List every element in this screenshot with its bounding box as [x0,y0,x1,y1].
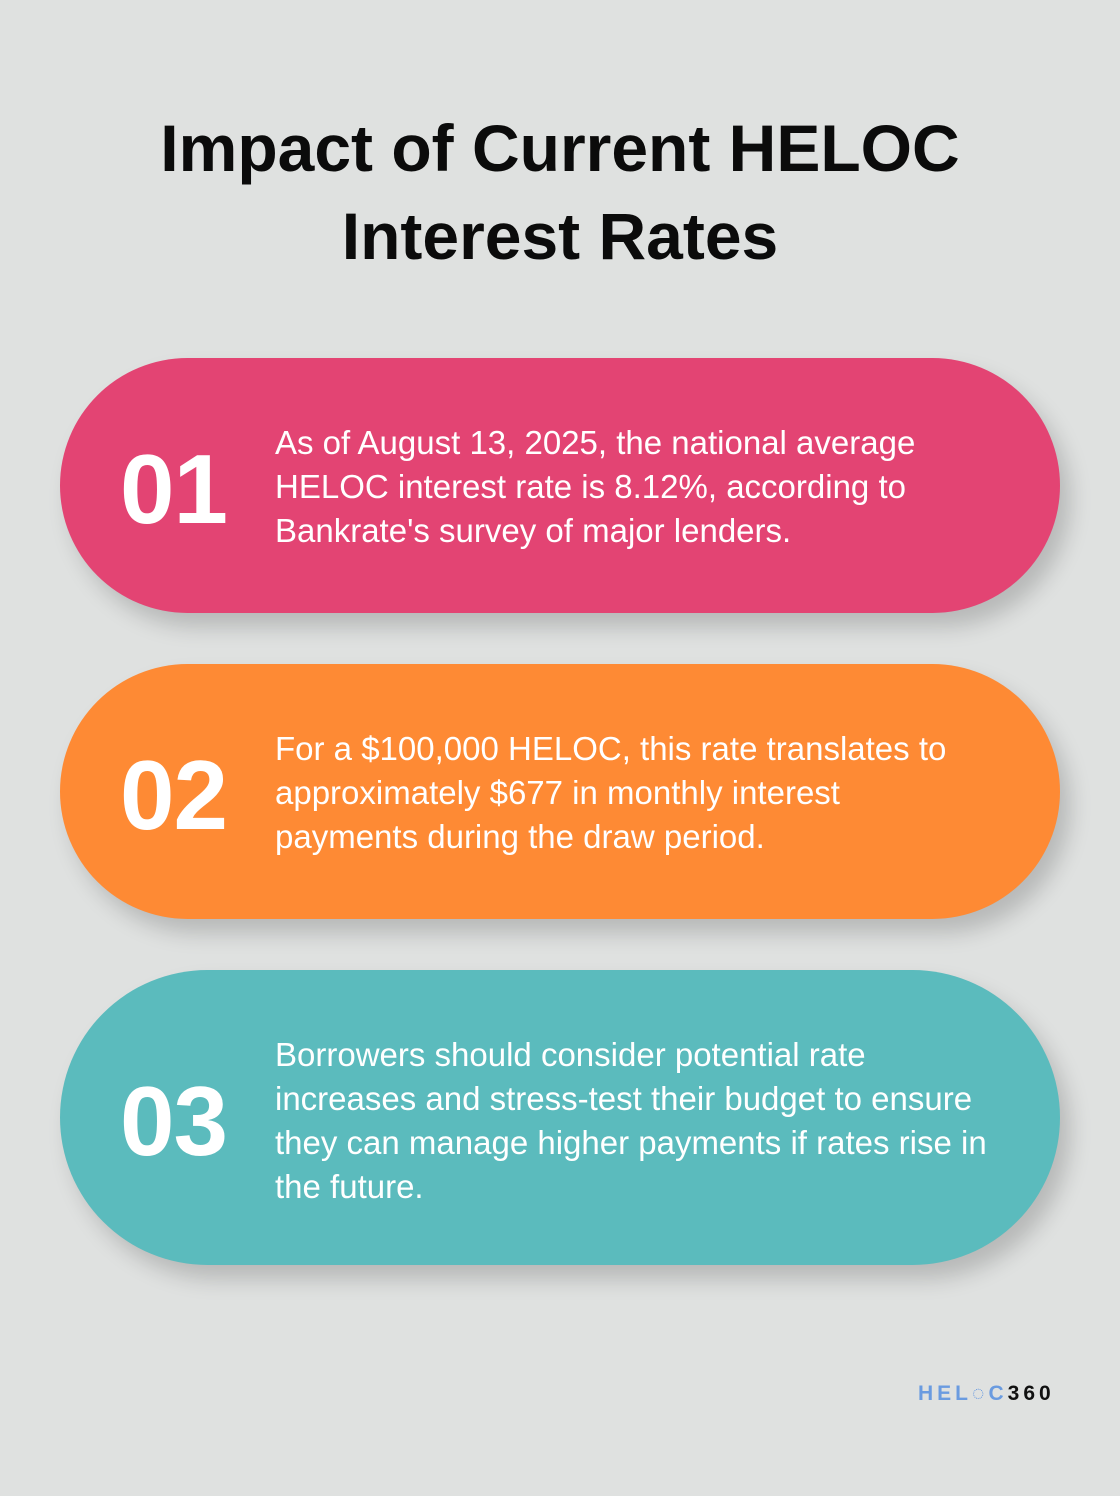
number 01: 01 [120,434,227,544]
panel: 03 [60,970,1060,1265]
title [160,111,960,273]
title: Impact of Current HELOC [160,111,960,185]
logo: HEL◌C360 [918,1382,1055,1405]
number 03: 03 [120,1066,227,1176]
text 01: As of August 13, 2025, the national average HELOC interest rate is 8.12%, according to Bankrate's survey of major lenders. [275,424,915,549]
number 02: 02 [120,740,227,850]
panel: 01 [60,358,1060,613]
text 03: Borrowers should consider potential rate increases and stress-test their budget to ensure they can manage higher payments if rates rise in the future. [275,1036,987,1205]
panel: 02 [60,664,1060,919]
title: Interest Rates [342,199,778,273]
text 02: For a $100,000 HELOC, this rate translates to approximately $677 in monthly interest payments during the draw period. [275,730,946,855]
